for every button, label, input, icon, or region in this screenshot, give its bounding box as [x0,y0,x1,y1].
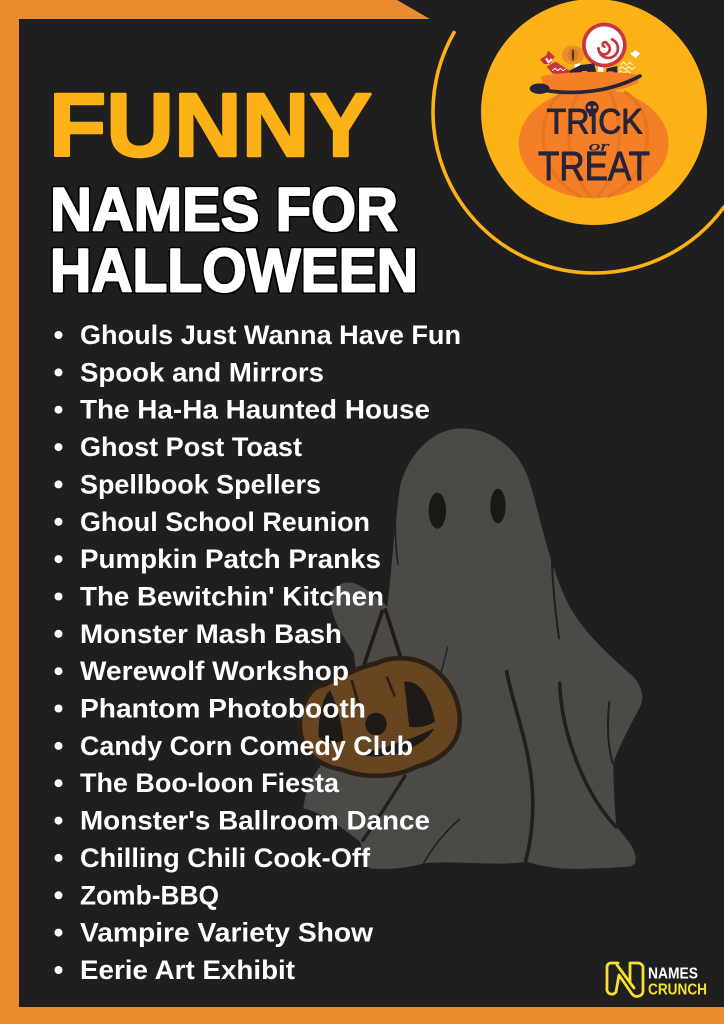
bullet list of names: Candy Corn Comedy Club [80,731,413,761]
bucket rim [541,72,641,93]
bullet list of names: Phantom Photobooth [80,694,366,724]
lettering: trick or treat [538,102,650,189]
white candy tip [630,50,640,58]
bullet list of names: Ghost Post Toast [80,432,302,462]
ghost body [303,428,642,869]
dark candies [569,63,617,76]
ghost fold lines [363,488,633,872]
lettering: trick or treat: TREAT [538,143,650,189]
ghost eyes [429,489,506,529]
bullet list of names: Spook and Mirrors [80,357,324,387]
pumpkin body [519,88,669,198]
bullet list of names: The Ha-Ha Haunted House [80,395,430,425]
wrapped candy right [617,62,635,73]
decorative arc around badge [433,32,724,273]
bucket handle [536,76,640,92]
title: names for halloween [50,176,418,304]
bullet list of names: Ghouls Just Wanna Have Fun [80,320,461,350]
logo wordmark: NAMES [648,966,698,982]
wrapped candy left [540,51,569,76]
title: funny: FUNNY [49,76,372,176]
skull [585,101,599,116]
logo wordmark [648,966,707,998]
names crunch logo [607,963,707,998]
ghost illustration [300,428,642,872]
bullet list of names [54,320,461,985]
logo mark [607,963,643,996]
badge: trick or treat bucket [481,0,707,225]
lettering: trick or treat: or [589,140,610,155]
bullet list of names: Monster Mash Bash [80,619,342,649]
title: names for halloween: NAMES FOR [50,176,398,244]
bullet list of names: The Bewitchin' Kitchen [80,582,384,612]
bullet list of names: Werewolf Workshop [80,656,349,686]
bullet list of names: Ghoul School Reunion [80,507,370,537]
bullet list of names: Spellbook Spellers [80,469,321,499]
lollipop [582,23,627,77]
title: names for halloween: HALLOWEEN [50,236,418,304]
bullet list of names: Pumpkin Patch Pranks [80,544,381,574]
bullet list of names: Zomb-BBQ [80,880,219,910]
bullet list of names: Chilling Chili Cook-Off [80,843,370,873]
jack-o-lantern pumpkin [300,658,460,776]
bullet list of names: Eerie Art Exhibit [80,955,295,985]
logo wordmark: CRUNCH [648,982,707,998]
pumpkin bucket handle [364,608,401,665]
bullet list of names: Monster's Ballroom Dance [80,806,430,836]
lettering: trick or treat: TRICK [547,102,643,141]
bullet list of names: The Boo-loon Fiesta [80,768,339,798]
pumpkin ribs [543,90,647,197]
bullet list of names: Vampire Variety Show [80,918,373,948]
candy eye [562,45,584,77]
